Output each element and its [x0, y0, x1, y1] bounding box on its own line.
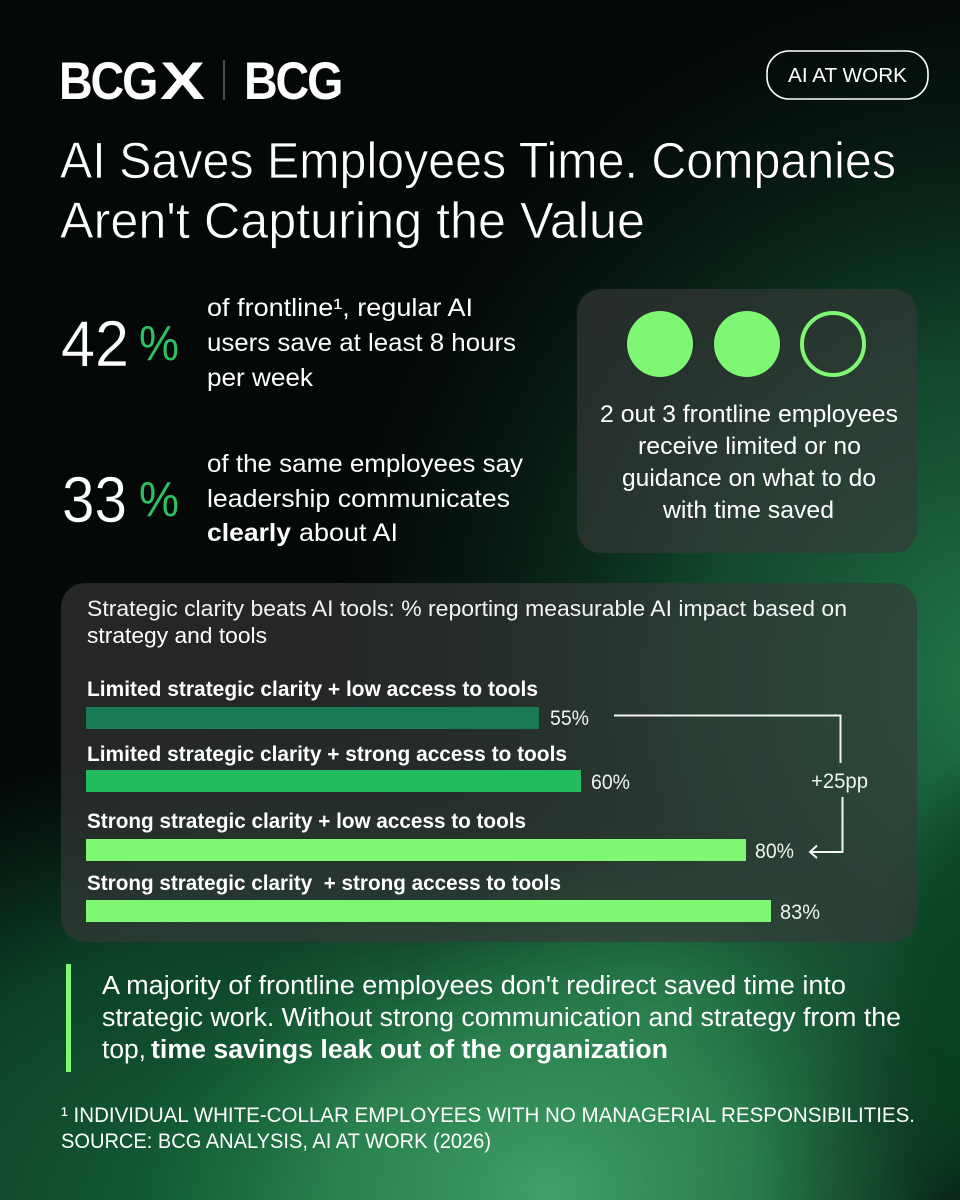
bar: strong clarity, low tools: 80% [755, 840, 794, 863]
bar: limited clarity, low tools: Limited strategic clarity + low access to tools [87, 678, 538, 701]
stat: 33 percent: of the same employees say [207, 450, 524, 478]
footnote [61, 1104, 915, 1153]
bar: limited clarity, strong tools: Limited strategic clarity + strong access to tools [87, 743, 567, 766]
guidance text: with time saved [662, 497, 834, 524]
bar: limited clarity, low tools [86, 678, 589, 730]
callout: time savings leak out of the organization [151, 1036, 668, 1064]
logo: BCG X and BCG: BCG [244, 51, 341, 111]
stat: 33 percent [62, 450, 524, 547]
title: Aren't Capturing the Value [60, 192, 645, 249]
bar: strong clarity, low tools [86, 810, 794, 863]
logo: BCG X and BCG [59, 51, 341, 111]
stat: 33 percent: 33 [62, 463, 127, 536]
bar: strong clarity, strong tools: 83% [780, 901, 820, 924]
arrow: +25pp from 55% to 80% [614, 716, 868, 858]
callout [66, 964, 901, 1072]
stat: 42 percent: users save at least 8 hours [207, 329, 516, 357]
tag: AI AT WORK [767, 51, 928, 99]
callout: A majority of frontline employees don't redirect saved time into [102, 972, 846, 1000]
bar: strong clarity, strong tools [86, 872, 820, 924]
bar: strong clarity, strong tools: Strong strategic clarity + strong access to tools [87, 872, 561, 895]
chart heading [87, 596, 847, 648]
footnote: ¹ INDIVIDUAL WHITE-COLLAR EMPLOYEES WITH NO MANAGERIAL RESPONSIBILITIES. [61, 1104, 915, 1127]
guidance text: guidance on what to do [622, 465, 876, 492]
arrow: +25pp from 55% to 80%: +25pp [811, 770, 868, 793]
stat: 42 percent [61, 294, 516, 392]
guidance text [600, 401, 898, 524]
stat: 33 percent: about AI [299, 519, 398, 547]
stat: 33 percent: leadership communicates [207, 485, 510, 513]
bar: limited clarity, strong tools: 60% [591, 771, 630, 794]
footnote: SOURCE: BCG ANALYSIS, AI AT WORK (2026) [61, 1130, 491, 1153]
panel: strategic clarity chart [61, 583, 917, 942]
bar: limited clarity, strong tools [86, 743, 630, 794]
stat: 42 percent: % [139, 317, 179, 371]
tag: AI AT WORK: AI AT WORK [788, 65, 908, 87]
guidance text: 2 out 3 frontline employees [600, 401, 898, 428]
bar: limited clarity, low tools: 55% [550, 707, 589, 730]
logo: BCG X and BCG: X [160, 52, 205, 111]
stat: 42 percent: of frontline¹, regular AI [207, 294, 473, 322]
stat: 33 percent: clearly [207, 519, 291, 547]
callout: strategic work. Without strong communication and strategy from the [102, 1004, 901, 1032]
chart heading: strategy and tools [87, 623, 267, 648]
icon: three circles, two filled [627, 311, 864, 377]
chart heading: Strategic clarity beats AI tools: % reporting measurable AI impact based on [87, 596, 847, 621]
bar: strong clarity, low tools: Strong strategic clarity + low access to tools [87, 810, 526, 833]
title [60, 132, 896, 249]
callout: top, [102, 1036, 146, 1064]
panel: guidance [577, 289, 917, 553]
stat: 33 percent: % [139, 473, 179, 527]
stat: 42 percent: 42 [61, 307, 129, 380]
title: AI Saves Employees Time. Companies [60, 132, 896, 189]
logo: BCG X and BCG: BCG [59, 51, 156, 111]
stat: 42 percent: per week [207, 364, 314, 392]
guidance text: receive limited or no [638, 433, 861, 460]
